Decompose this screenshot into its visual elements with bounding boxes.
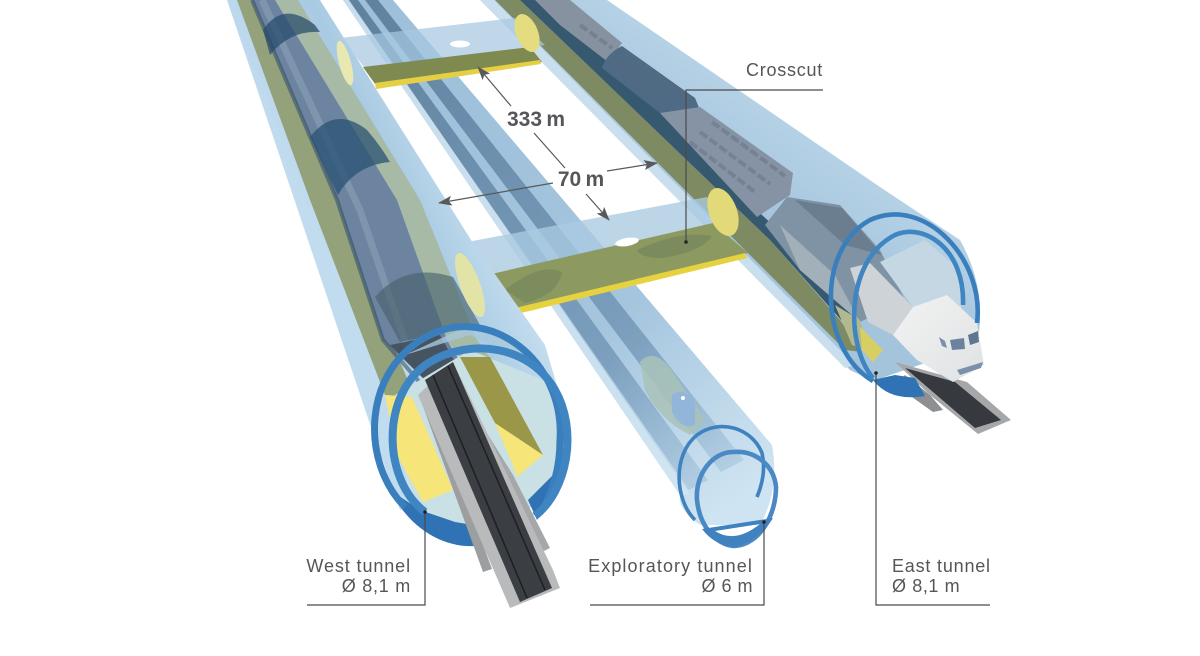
blue blob with highlight — [672, 392, 695, 426]
dimension: 333 m: 333 m — [507, 108, 565, 131]
label: Crosscut: Crosscut — [746, 60, 823, 80]
high-speed train — [850, 263, 984, 382]
west tunnel interior — [395, 350, 562, 530]
label: West tunnel — [306, 510, 427, 605]
dimension: 333 m — [478, 67, 565, 168]
label: East tunnel: East tunnel — [892, 556, 991, 576]
bottom crosscut highlight — [614, 236, 640, 248]
label: West tunnel: Ø 8,1 m — [342, 576, 411, 596]
east tunnel — [480, 0, 980, 381]
olive floor inside ring — [835, 305, 868, 350]
east tunnel rings — [831, 215, 978, 397]
ring interior — [880, 240, 962, 320]
west tunnel sage wall — [275, 0, 495, 365]
west track — [418, 362, 560, 608]
west crosscut ends — [333, 39, 491, 320]
freight train — [535, 0, 793, 217]
dimension: 70 m — [439, 163, 657, 220]
label: Crosscut — [684, 60, 823, 244]
east tunnel dark base — [520, 0, 860, 330]
label: Exploratory tunnel: Exploratory tunnel — [588, 556, 753, 576]
east track — [895, 362, 1011, 434]
label: Exploratory tunnel — [588, 520, 766, 605]
exploratory tunnel — [343, 0, 776, 547]
west tunnel slate band — [252, 0, 465, 380]
label: West tunnel: West tunnel — [306, 556, 411, 576]
label: East tunnel: Ø 8,1 m — [892, 576, 960, 596]
crosscut bottom — [462, 184, 748, 314]
arch shadows — [263, 14, 480, 380]
yellow platforms — [385, 357, 543, 502]
west tunnel — [227, 0, 570, 608]
crosscut top — [340, 10, 545, 89]
east tunnel front — [831, 215, 1011, 434]
label: East tunnel — [874, 371, 991, 605]
label: Exploratory tunnel: Ø 6 m — [701, 576, 753, 596]
locomotive rear — [765, 197, 905, 322]
exploratory tunnel rings — [679, 427, 776, 547]
dimension: 70 m: 70 m — [558, 168, 604, 191]
west tunnel rings — [375, 327, 567, 546]
east platform — [860, 327, 883, 362]
sage blob — [640, 356, 705, 435]
top crosscut highlight — [450, 40, 470, 48]
east tunnel olive floor — [495, 0, 862, 352]
west tunnel olive floor — [237, 0, 415, 397]
